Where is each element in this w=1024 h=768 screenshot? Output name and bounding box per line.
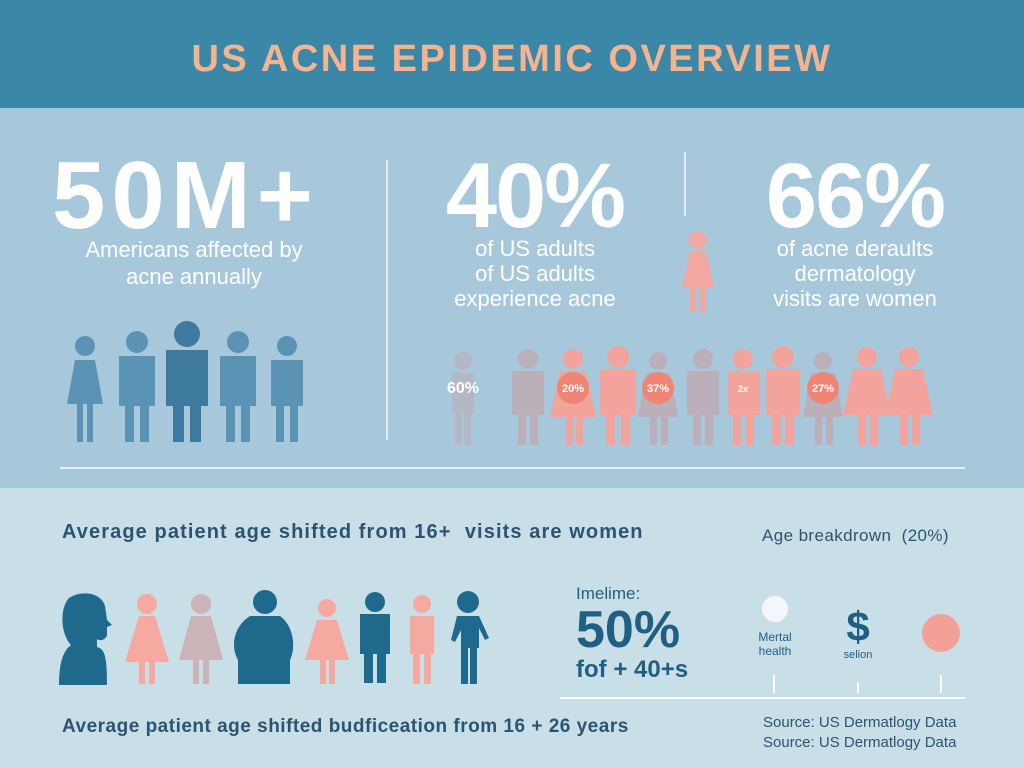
icon: dollar: $: [846, 603, 870, 650]
icon: mental health: Mertal: [758, 630, 792, 644]
icon: woman pink: [682, 231, 714, 312]
stat 50M+: Americans affected by acne annually: [85, 237, 303, 289]
stat 50%: 50%: [576, 601, 680, 659]
bottom figures: [59, 590, 489, 685]
figures: percentage row: 2x: [738, 384, 748, 394]
icon: mental health: [758, 596, 792, 658]
stat 40%: [446, 145, 624, 311]
age breakdown label: Age breakdrown (20%): [762, 526, 949, 545]
stat 50M+: 50M+: [52, 142, 319, 249]
stat 50%: fof + 40+s: [576, 656, 688, 683]
stat 40%: 40%: [446, 145, 624, 247]
source: Source: US Dermatlogy Data: [763, 734, 956, 751]
icon: dollar: selion: [844, 649, 872, 661]
stat 50%: [576, 584, 688, 683]
source: [763, 714, 956, 751]
stat 40%: of US adults: [475, 236, 595, 261]
figures: percentage row: [447, 346, 933, 445]
stat 66%: of acne deraults: [777, 236, 933, 261]
subheading: Average patient age shifted from 16+ visits are women: [62, 521, 644, 543]
stat 40%: experience acne: [454, 286, 616, 311]
stat 66%: visits are women: [773, 286, 937, 311]
top panel: [0, 108, 1024, 488]
dividers: [386, 160, 388, 440]
stat 66%: 66%: [766, 145, 944, 247]
figures: percentage row: 20%: [562, 383, 584, 395]
figures: percentage row: 37%: [647, 383, 669, 395]
source: Source: US Dermatlogy Data: [763, 714, 956, 731]
figures: percentage row: 27%: [812, 383, 834, 395]
footer text: Average patient age shifted budficeation from 16 + 26 years: [62, 716, 629, 737]
icon: face: [922, 614, 960, 652]
title: US ACNE EPIDEMIC OVERVIEW: [191, 38, 833, 80]
icon: mental health: health: [759, 644, 791, 658]
header bar: [0, 0, 1024, 108]
figures: percentage row: 60%: [447, 380, 479, 397]
stat 66%: dermatology: [794, 261, 916, 286]
stat 66%: [766, 145, 944, 311]
stat 40%: of US adults: [475, 261, 595, 286]
figures: Americans: [67, 321, 303, 442]
stat 50%: Imelime:: [576, 584, 640, 603]
icon: dollar: [844, 603, 872, 661]
